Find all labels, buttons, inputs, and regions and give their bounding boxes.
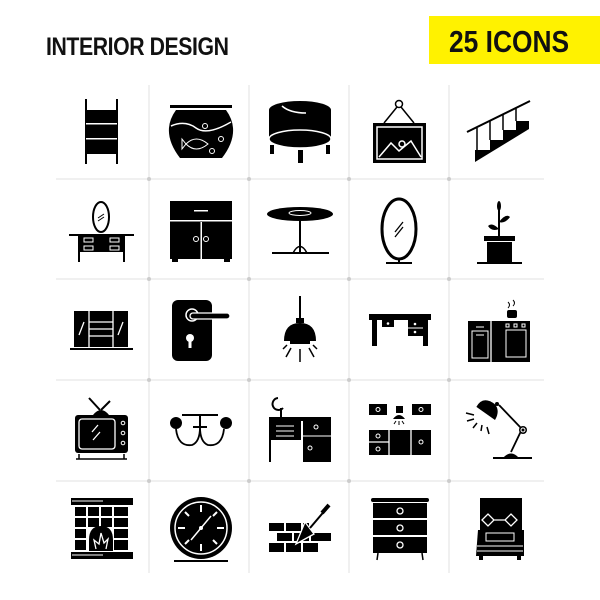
icon: bed bbox=[476, 498, 524, 560]
icon: wardrobe bbox=[70, 311, 133, 350]
icon: standing mirror bbox=[382, 199, 416, 264]
icon: kitchen cabinets bbox=[369, 404, 431, 455]
icon: wall clock bbox=[170, 497, 232, 562]
icon: chandelier bbox=[170, 415, 232, 445]
icon: door handle bbox=[172, 300, 230, 361]
icon: kitchen counter bbox=[468, 300, 530, 362]
title: INTERIOR DESIGN bbox=[46, 33, 229, 61]
icon: television bbox=[75, 398, 128, 459]
icon: dressing table bbox=[69, 202, 134, 262]
icon: chest of drawers bbox=[371, 498, 429, 560]
icon: potted plant bbox=[477, 201, 522, 264]
icon: fishbowl bbox=[169, 105, 233, 158]
icon: desk with lamp bbox=[269, 398, 331, 462]
icon: round table bbox=[267, 207, 333, 254]
icon: desk bbox=[369, 314, 431, 346]
icon: fireplace bbox=[71, 498, 133, 559]
icon: ottoman bbox=[269, 101, 331, 163]
badge: 25 icons: 25 ICONS bbox=[449, 24, 569, 59]
icon: staircase bbox=[467, 101, 530, 162]
icon: desk lamp bbox=[466, 397, 532, 459]
icon: pendant lamp bbox=[283, 296, 317, 362]
badge: 25 icons bbox=[429, 16, 600, 64]
icon: ladder shelf bbox=[85, 99, 118, 164]
icon: picture frame bbox=[373, 100, 426, 163]
icon: cabinet bbox=[170, 201, 232, 262]
icon: bricks and trowel bbox=[269, 505, 331, 552]
